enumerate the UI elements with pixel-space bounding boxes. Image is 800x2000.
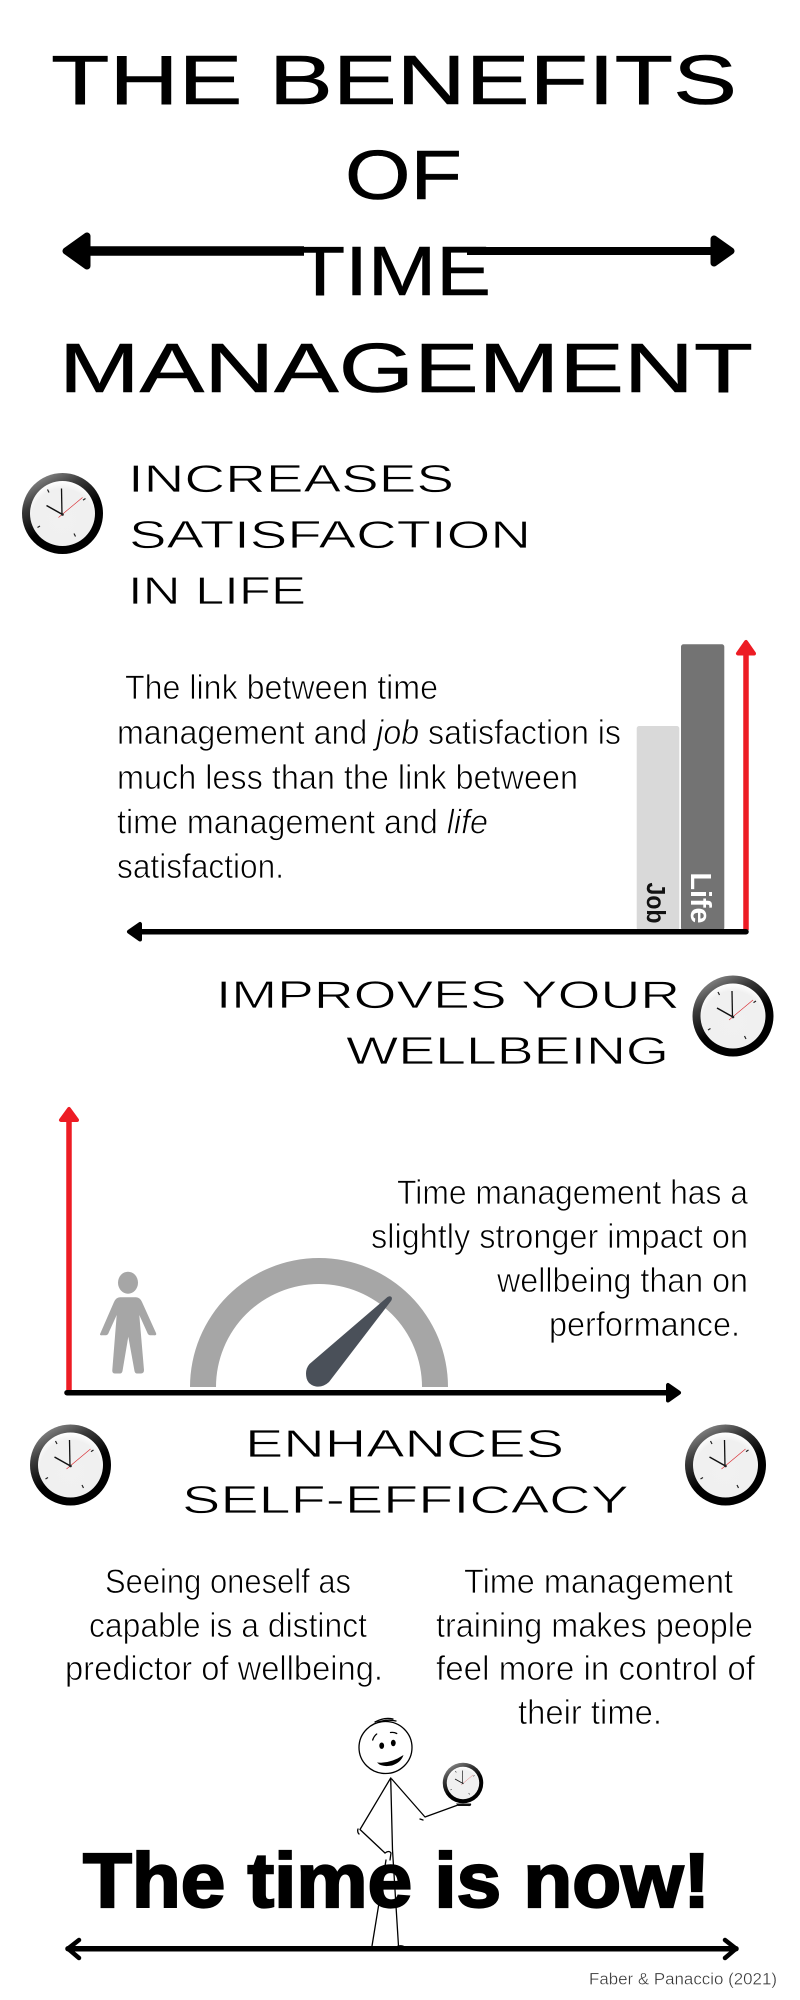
title line 4: MANAGEMENT bbox=[59, 329, 753, 407]
text block: training and control: feel more in control of bbox=[436, 1650, 756, 1688]
text block: wellbeing vs performance: slightly stronger impact on bbox=[371, 1218, 748, 1256]
bar chart: job and life satisfaction bbox=[637, 644, 724, 930]
figure hand bbox=[456, 1804, 471, 1806]
text block: job vs life satisfaction bbox=[117, 669, 621, 886]
arrow: bottom double-headed timeline bbox=[68, 1940, 736, 1958]
bar: life bbox=[681, 644, 724, 930]
callout: the time is now: The time is now! bbox=[83, 1838, 710, 1924]
text block: wellbeing vs performance: Time management has a bbox=[397, 1174, 748, 1212]
icon: small clock bbox=[443, 1763, 483, 1803]
heading: enhances self-efficacy: SELF-EFFICACY bbox=[182, 1479, 629, 1522]
text block: job vs life satisfaction: time management and life bbox=[117, 804, 488, 842]
text block: job vs life satisfaction: much less than the link between bbox=[117, 759, 578, 797]
heading: enhances self-efficacy: ENHANCES bbox=[245, 1423, 564, 1466]
icon: clock 1 bbox=[22, 473, 103, 554]
arrow: black horizontal axis 1 bbox=[129, 924, 746, 940]
text block: wellbeing vs performance bbox=[371, 1174, 748, 1344]
icon: person bbox=[100, 1272, 156, 1374]
gauge bbox=[190, 1258, 448, 1387]
bar label: job: Job bbox=[641, 882, 671, 924]
text block: wellbeing vs performance: performance. bbox=[549, 1306, 740, 1344]
arrow: red vertical axis 1 bbox=[738, 642, 754, 930]
text block: seeing oneself as capable: capable is a distinct bbox=[89, 1607, 368, 1645]
figure outline bbox=[358, 1718, 458, 1948]
title line 1: THE BENEFITS bbox=[51, 41, 737, 119]
text block: training and control: training makes people bbox=[436, 1607, 753, 1645]
heading: improves your wellbeing: IMPROVES YOUR bbox=[216, 974, 680, 1017]
text block: job vs life satisfaction: The link between time bbox=[125, 669, 438, 707]
text block: training and control: Time management bbox=[464, 1563, 734, 1601]
citation: Faber & Panaccio (2021) bbox=[589, 1970, 777, 1988]
title bbox=[51, 41, 753, 407]
gauge needle bbox=[306, 1296, 392, 1387]
text block: seeing oneself as capable: Seeing oneself as bbox=[105, 1563, 351, 1601]
heading: increases satisfaction in life: SATISFACTION bbox=[129, 514, 531, 557]
text block: wellbeing vs performance: wellbeing than on bbox=[496, 1262, 748, 1300]
heading: increases satisfaction in life bbox=[128, 458, 531, 613]
arrow: red vertical axis 2 bbox=[61, 1109, 77, 1392]
bar label: life: Life bbox=[684, 872, 716, 924]
text block: job vs life satisfaction: satisfaction. bbox=[117, 848, 284, 886]
title line 2: OF bbox=[345, 136, 462, 214]
title line 3: TIME bbox=[295, 232, 491, 310]
heading: enhances self-efficacy bbox=[182, 1423, 629, 1522]
heading: increases satisfaction in life: IN LIFE bbox=[128, 570, 306, 613]
icon: clock 2 bbox=[692, 976, 774, 1056]
text block: seeing oneself as capable bbox=[65, 1563, 383, 1688]
arrow: black horizontal axis 2 bbox=[67, 1385, 679, 1400]
icon: clock 3 bbox=[30, 1424, 111, 1506]
heading: increases satisfaction in life: INCREASES bbox=[128, 458, 454, 501]
icon: clock 4 bbox=[685, 1424, 766, 1506]
title arrow bbox=[66, 236, 731, 266]
gauge arc bbox=[190, 1258, 448, 1387]
heading: improves your wellbeing: WELLBEING bbox=[346, 1030, 669, 1073]
text block: training and control: their time. bbox=[518, 1694, 662, 1732]
stick figure holding clock bbox=[358, 1718, 483, 1948]
bar: job bbox=[637, 726, 679, 930]
text block: training and control bbox=[436, 1563, 756, 1732]
heading: improves your wellbeing bbox=[216, 974, 680, 1073]
figure eyes and smile bbox=[377, 1740, 404, 1766]
text block: seeing oneself as capable: predictor of wellbeing. bbox=[65, 1650, 383, 1688]
text block: job vs life satisfaction: management and job satisfaction is bbox=[117, 714, 621, 752]
